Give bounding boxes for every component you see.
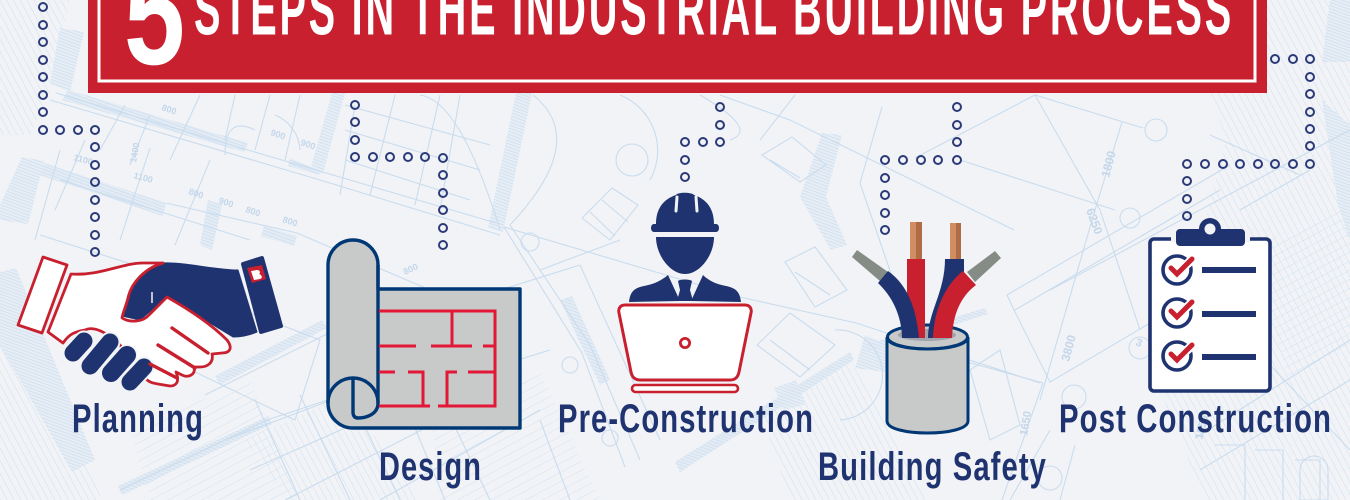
background: blueprint: 800 (187, 186, 205, 201)
title banner (88, 0, 1267, 95)
laptop (619, 305, 751, 380)
navy hand (122, 263, 257, 337)
dotted path: post construction (1183, 55, 1314, 220)
label: building safety: Building Safety (818, 445, 1047, 489)
dotted path: planning (39, 3, 99, 256)
background: blueprint: 6250 (1083, 206, 1106, 236)
label: pre-construction: Pre-Construction (558, 397, 814, 441)
white hand (48, 263, 230, 386)
background: blueprint: 800 (281, 214, 299, 229)
dotted path: pre-construction (681, 103, 724, 181)
background: blueprint: 1550 (1193, 414, 1211, 441)
background: blueprint: 1100 (132, 170, 154, 185)
clip (1199, 218, 1221, 240)
wires (907, 259, 925, 338)
jacket (888, 325, 968, 349)
background: blueprint: 1800 (1098, 149, 1119, 179)
background: blueprint: 1400 (128, 142, 141, 163)
finger halos (73, 341, 144, 382)
checklist row 1 (1163, 256, 1256, 284)
copper conductors (910, 222, 922, 259)
head (656, 237, 714, 274)
background: blueprint: 1100 (72, 152, 94, 167)
checklist row 2 (1163, 299, 1256, 327)
tie (677, 280, 693, 301)
fingers (73, 341, 144, 382)
background: blueprint: 800 (160, 102, 178, 117)
background: blueprint: 800 (402, 261, 419, 277)
icon: blueprint scroll (328, 240, 520, 428)
background: blueprint: 900 (299, 137, 317, 152)
cable body (887, 337, 968, 433)
helmet (651, 193, 719, 232)
label: planning: Planning (72, 397, 204, 441)
grey conductors (852, 250, 888, 282)
icon: handshake (18, 257, 281, 386)
background: blueprint: 900 (217, 195, 235, 210)
icon: electrical cable (852, 222, 1001, 433)
icon: checklist clipboard (1150, 218, 1270, 391)
background: blueprint: 800 (244, 204, 262, 219)
dotted path: design (351, 101, 447, 249)
cuff logo (247, 265, 266, 283)
thumb highlight (151, 292, 153, 303)
checklist row 3 (1163, 342, 1256, 370)
label: design: Design (379, 445, 482, 489)
icon: construction worker with laptop (619, 193, 751, 392)
navy cuff (243, 258, 281, 332)
finger lines (150, 328, 208, 378)
floor plan (379, 311, 495, 406)
background: blueprint: 900 (269, 127, 287, 142)
background: blueprint: 3 (1134, 337, 1144, 350)
left cuff (18, 257, 67, 333)
dotted connectors (39, 3, 1314, 256)
background: blueprint: 1650 (1018, 410, 1034, 437)
shoulders (629, 275, 741, 302)
background: blueprint: 3800 (1058, 333, 1079, 363)
dotted path: building safety (881, 103, 961, 234)
scroll curl (328, 378, 378, 418)
